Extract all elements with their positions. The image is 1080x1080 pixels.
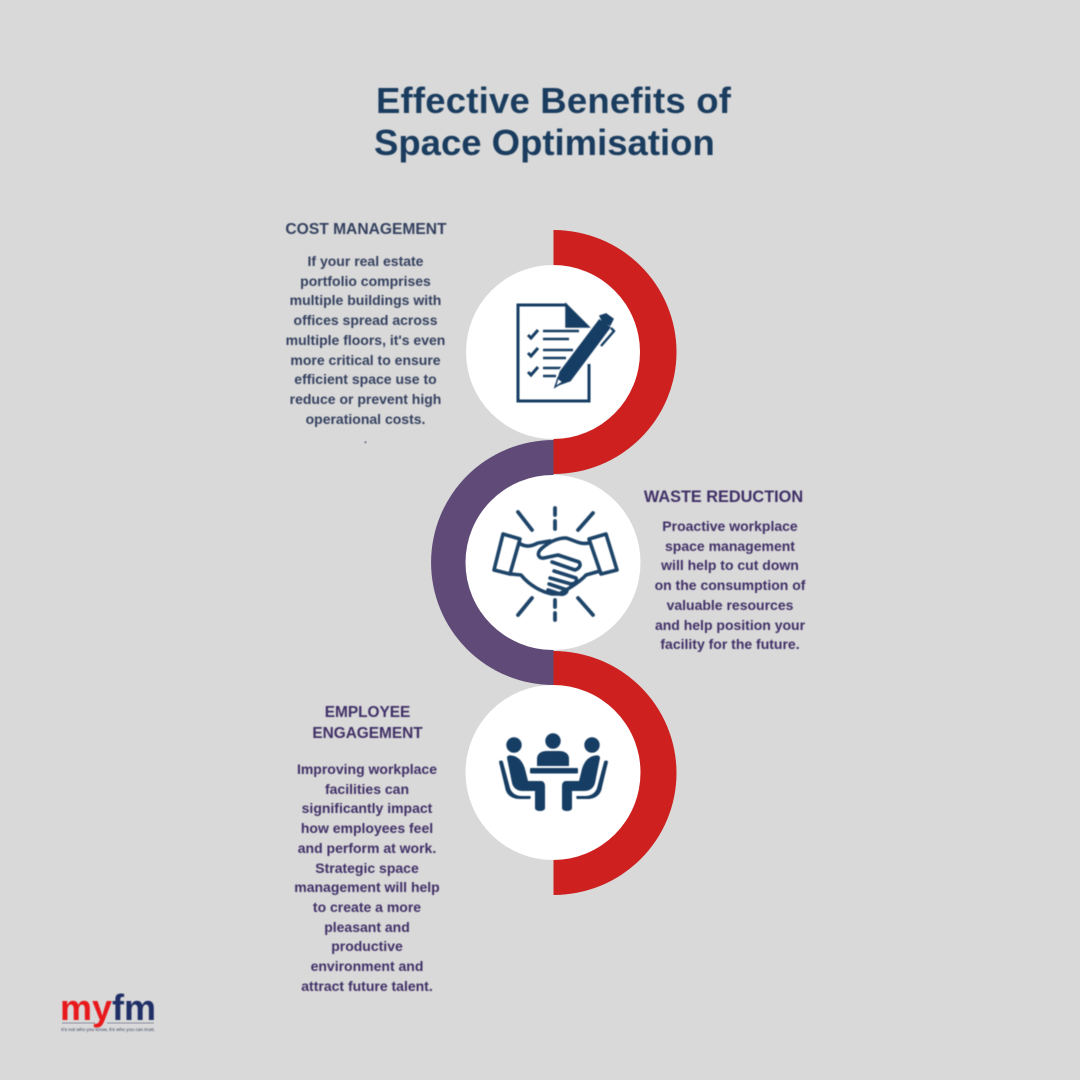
text: employee engagement: pleasant and [324, 919, 410, 935]
text: employee engagement: facilities can [325, 781, 409, 797]
text: employee engagement: Improving workplace [297, 761, 437, 777]
text: waste reduction: on the consumption of [655, 577, 805, 593]
text: employee engagement: environment and [311, 958, 423, 974]
text: employee engagement: productive [331, 938, 403, 954]
title [374, 80, 732, 164]
text: waste reduction: will help to cut down [661, 557, 799, 573]
heading: waste reduction: WASTE REDUCTION [644, 488, 803, 506]
text: employee engagement: to create a more [313, 899, 421, 915]
text: waste reduction: space management [665, 538, 795, 554]
text: cost management: efficient space use to [294, 371, 437, 387]
text: waste reduction: Proactive workplace [662, 518, 798, 534]
text: cost management: operational costs. [306, 411, 425, 427]
circle: top white [466, 265, 640, 439]
logo: myfm: myfm [60, 987, 156, 1028]
icon: checklist and pen [518, 304, 614, 401]
text: employee engagement: how employees feel [301, 820, 433, 836]
logo rule [62, 1022, 154, 1024]
text: cost management: multiple floors, it's even [286, 332, 445, 348]
text: employee engagement: Strategic space [315, 860, 419, 876]
heading: employee engagement [312, 704, 424, 742]
heading: cost management: COST MANAGEMENT [285, 220, 447, 238]
heading: employee engagement: ENGAGEMENT [312, 724, 423, 742]
title: Effective Benefits of [376, 80, 731, 121]
logo tagline: It's not who you know, it's who you can trust. [61, 1028, 155, 1033]
text: employee engagement: attract future talent. [301, 978, 433, 994]
title: Space Optimisation [374, 122, 715, 163]
icon: meeting around a table [499, 733, 608, 811]
heading: employee engagement: EMPLOYEE [325, 704, 410, 720]
arc: bottom red [554, 651, 676, 895]
circle: middle white [466, 475, 640, 650]
text: cost management: offices spread across [294, 312, 437, 328]
text: cost management: portfolio comprises [300, 273, 431, 289]
arc: top red [554, 230, 676, 474]
circle: bottom white [466, 685, 640, 860]
text: cost management: . [364, 435, 367, 446]
text: cost management: If your real estate [308, 253, 423, 269]
text: cost management: more critical to ensure [290, 352, 441, 368]
text: waste reduction: and help position your [655, 617, 805, 633]
text: cost management: multiple buildings with [290, 292, 441, 308]
arc: middle purple [431, 440, 554, 685]
text: employee engagement: and perform at work. [298, 840, 436, 856]
text: employee engagement: significantly impact [302, 800, 432, 816]
text: waste reduction: valuable resources [667, 597, 793, 613]
text: waste reduction [654, 518, 806, 653]
text: waste reduction: facility for the future. [660, 636, 800, 652]
icon: handshake [494, 508, 617, 620]
text: employee engagement [294, 761, 440, 994]
text: cost management: reduce or prevent high [290, 391, 441, 407]
text: employee engagement: management will help [294, 879, 440, 895]
text: cost management [286, 253, 446, 446]
